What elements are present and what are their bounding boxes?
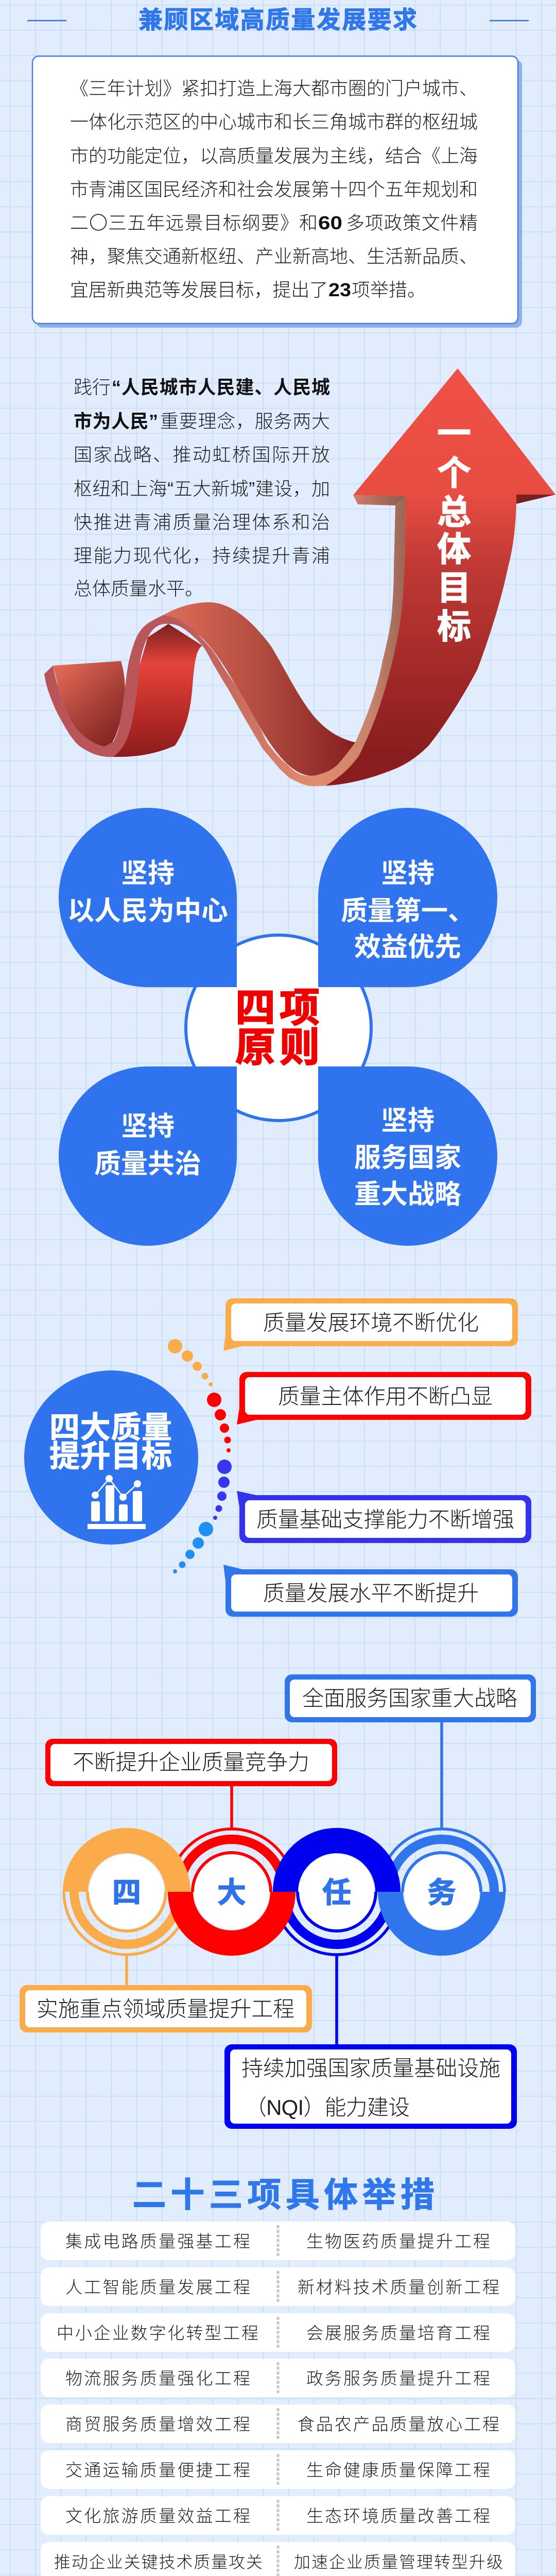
bubble: market players prominent [237,1372,531,1425]
bubble: environment optimised: 质量发展环境不断优化 [263,1311,479,1335]
row 2: 新材料技术质量创新工程 [298,2278,499,2297]
label: overall goal vertical text: 一 [437,414,471,452]
petal: people-centred: 以人民为中心 [67,896,228,926]
text block: introduction paragraph: 二〇三五年远景目标纲要》和 [70,212,318,233]
badge: four quality targets: 提升目标 [49,1439,172,1473]
row 3: 会展服务质量培育工程 [306,2324,490,2343]
text block: overall goal description: 枢纽和上海“五大新城”建设，加 [74,478,330,499]
text block: introduction paragraph [70,78,478,300]
text block: introduction paragraph: 60 [318,212,342,233]
petal: shared governance [59,1066,237,1246]
text block: overall goal description: 总体质量水平。 [74,578,203,599]
box: national quality infrastructure: （NQI）能力建设 [245,2095,410,2120]
text block: introduction paragraph: 23 [328,279,351,300]
box: national quality infrastructure [224,2044,517,2129]
box: national quality infrastructure: 持续加强国家质量基础设施 [241,2056,500,2080]
icon: red rising ribbon arrow with overall goal [44,368,555,786]
circles: characters of four tasks: 四 [112,1876,141,1909]
dots: blue trail [173,1522,213,1573]
text block: overall goal description: 市为人民” [74,411,158,432]
row 2 [41,2267,515,2306]
row 6: 生命健康质量保障工程 [306,2461,490,2480]
petal: quality first [318,808,497,987]
petal: shared governance: 质量共治 [94,1149,201,1179]
row 8 [41,2542,515,2576]
dots: orange trail [168,1339,213,1386]
row 6: 交通运输质量便捷工程 [65,2461,250,2480]
label: four principles: 原 [235,1025,275,1070]
row 5 [41,2404,515,2443]
text block: introduction paragraph: 神，聚焦交通新枢纽、产业新高地、生活新品质、 [70,246,478,267]
box: enterprise competitiveness [45,1739,337,1786]
row 7 [41,2496,515,2535]
text block: overall goal description: 快推进青浦质量治理体系和治 [74,512,330,533]
petal: serve national strategy: 服务国家 [354,1143,461,1173]
text block: introduction paragraph: 市青浦区国民经济和社会发展第十四个五年规划和 [70,179,478,200]
bubble: foundation support strengthened [237,1491,531,1543]
row 4 [41,2359,515,2397]
label: overall goal vertical text: 标 [437,607,471,646]
row 6 [41,2450,515,2489]
text block: overall goal description: 践行 [74,377,111,398]
box: enterprise competitiveness: 不断提升企业质量竞争力 [73,1750,309,1774]
row 7: 文化旅游质量效益工程 [65,2506,250,2526]
badge: four quality targets: 四大质量 [49,1411,172,1445]
text block: overall goal description: “人民城市人民建、人民城 [112,377,330,398]
bubble: development level raised: 质量发展水平不断提升 [263,1581,479,1605]
row 8: 推动企业关键技术质量攻关 [54,2553,263,2571]
text block: introduction paragraph: 项举措。 [352,279,426,300]
bubble: development level raised [223,1565,518,1617]
text block: overall goal description: 理能力现代化，持续提升青浦 [74,545,330,566]
label: four principles: 四 [235,985,275,1030]
diagram: four principles [59,808,497,1246]
bubble: market players prominent: 质量主体作用不断凸显 [278,1384,493,1409]
text block: overall goal description: 国家战略、推动虹桥国际开放 [74,444,330,465]
label: four principles: 则 [280,1025,320,1070]
text block: introduction paragraph: 市的功能定位，以高质量发展为主线，结合《上海 [70,145,478,166]
petal: serve national strategy: 重大战略 [354,1180,461,1210]
row 2: 人工智能质量发展工程 [65,2278,250,2297]
label: overall goal vertical text: 目 [437,569,471,607]
petal: serve national strategy: 坚持 [381,1106,435,1136]
text block: overall goal description [74,377,330,599]
row 4: 物流服务质量强化工程 [65,2369,250,2388]
panel: three-year plan introduction [32,56,522,328]
text block: introduction paragraph: 宜居新典范等发展目标，提出了 [70,279,328,300]
row 5: 食品农产品质量放心工程 [298,2415,499,2434]
circles: characters of four tasks [89,1854,479,1929]
icon: bar and line chart [88,1475,146,1529]
diagram: four quality targets [24,1298,531,1617]
row 3: 中小企业数字化转型工程 [57,2324,258,2343]
row 5: 商贸服务质量增效工程 [65,2415,250,2434]
text block: introduction paragraph: 《三年计划》紧扣打造上海大都市圈的门户城市、 [70,78,478,99]
label: overall goal vertical text: 总 [437,493,471,531]
petal: people-centred [59,808,237,987]
text block: introduction paragraph: 多项政策文件精 [346,212,478,233]
row 8: 加速企业质量管理转型升级 [294,2553,503,2571]
dots: red trail [207,1393,231,1452]
bubble: environment optimised [223,1298,518,1351]
petal: serve national strategy [318,1066,497,1246]
label: overall goal vertical text [437,414,471,646]
circles: characters of four tasks: 任 [322,1876,351,1909]
label: four principles: 项 [280,985,320,1030]
rings: solid half arcs [75,1840,493,1943]
petal: shared governance: 坚持 [121,1112,175,1142]
rings: thin concentric halves [64,1829,505,1955]
connector lines [127,1722,442,2044]
label: four principles [235,985,320,1070]
row 1: 集成电路质量强基工程 [65,2232,250,2251]
heading: twenty-three measures: 二十三项具体举措 [132,2176,435,2214]
text block: overall goal description: 重要理念，服务两大 [160,411,330,432]
petal: quality first: 效益优先 [354,933,461,962]
bubble: foundation support strengthened: 质量基础支撑能力不断增强 [256,1507,514,1532]
box: serve national strategy: 全面服务国家重大战略 [302,1686,517,1710]
dots: indigo trail [213,1460,232,1520]
list: twenty-three measures [41,2222,515,2576]
circles: characters of four tasks: 务 [427,1876,456,1909]
heading: regional development requirement: 兼顾区域高质量发展要求 [138,6,417,33]
box: serve national strategy [285,1674,536,1722]
circles: characters of four tasks: 大 [217,1876,246,1909]
petal: people-centred: 坚持 [121,859,175,889]
petal: quality first: 质量第一、 [341,896,475,926]
row 4: 政务服务质量提升工程 [306,2369,490,2388]
centre circle [186,935,371,1121]
row 1 [41,2222,515,2260]
row 1: 生物医药质量提升工程 [306,2232,490,2251]
petal: quality first: 坚持 [381,859,435,889]
box: key field quality projects: 实施重点领域质量提升工程 [37,1997,294,2021]
text block: introduction paragraph: 一体化示范区的中心城市和长三角城市群的枢纽城 [70,111,478,132]
badge: four quality targets [24,1370,198,1545]
row 7: 生态环境质量改善工程 [306,2506,490,2526]
row 3 [41,2313,515,2352]
diagram: four tasks [20,1674,536,2129]
label: overall goal vertical text: 个 [437,454,471,492]
label: overall goal vertical text: 体 [437,530,471,568]
box: key field quality projects [20,1985,312,2032]
